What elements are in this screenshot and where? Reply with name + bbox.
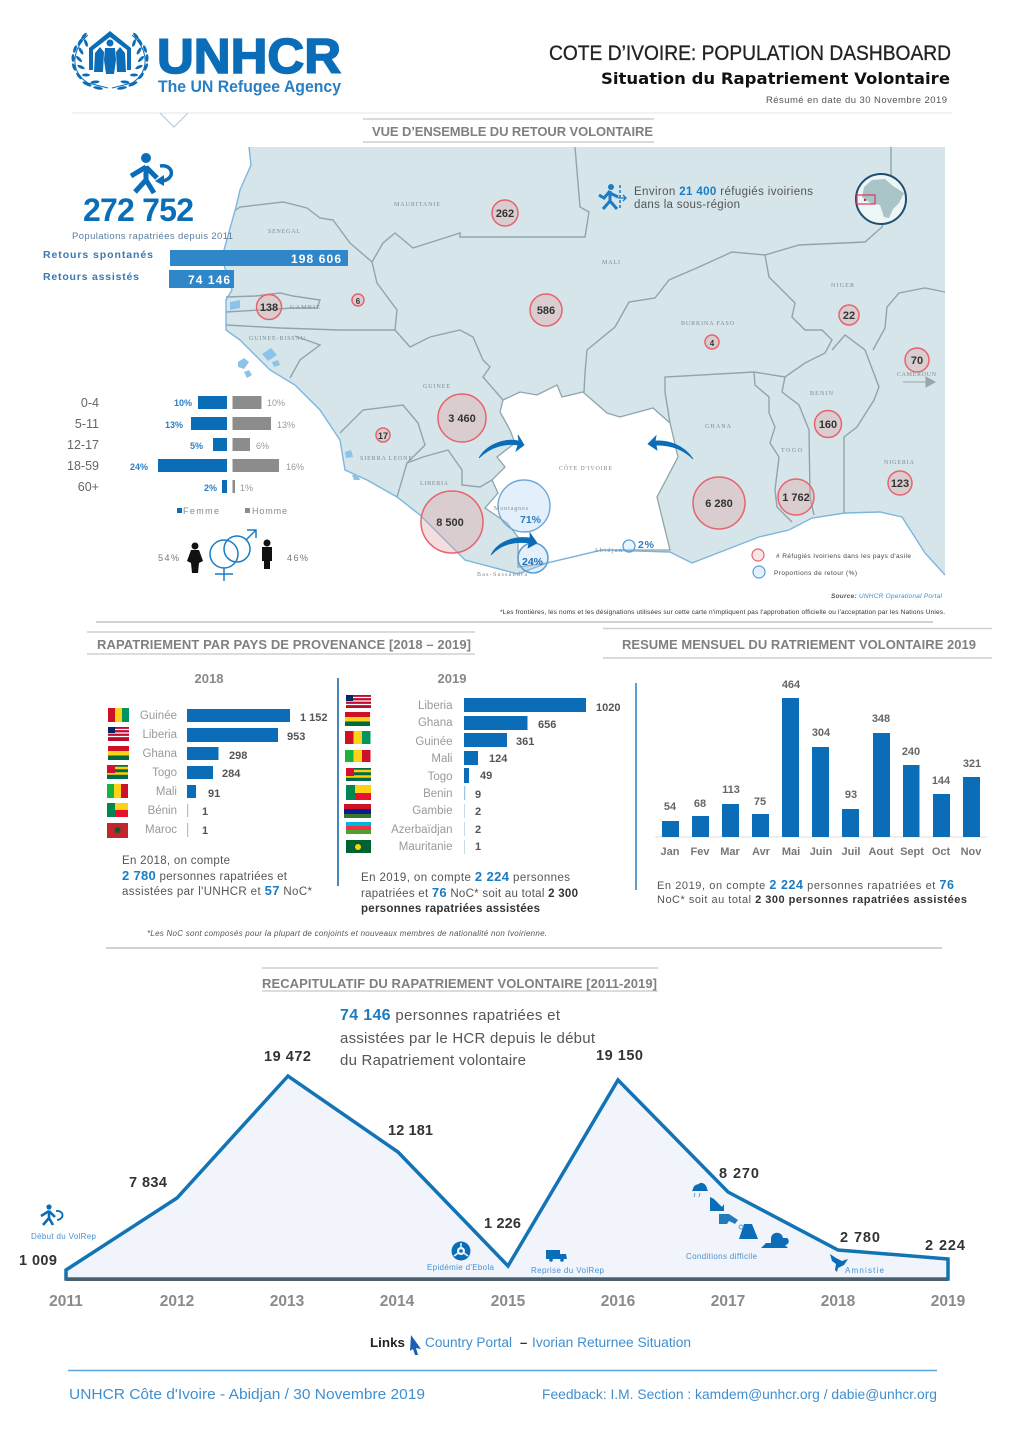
chart values: 7 834 <box>129 1175 167 1191</box>
chart: 2019 origin: 2 <box>475 824 481 836</box>
chart: age pyramid: 1% <box>240 483 253 493</box>
country labels: Abidjan <box>594 548 622 554</box>
chart values: 8 270 <box>719 1166 759 1182</box>
refugee counts: 4 <box>710 339 715 348</box>
chart: 2018 origin: 953 <box>287 731 305 743</box>
chart values <box>19 1048 965 1269</box>
annotation: Ebola epidemic: Epidémie d'Ebola <box>427 1263 495 1272</box>
chart: monthly 2019: 75 <box>754 796 766 808</box>
chart: monthly 2019: 54 <box>664 801 677 813</box>
bar: assisted <box>169 270 234 288</box>
text: 2019 summary <box>361 869 578 915</box>
chart: 2019 origin: Gambie <box>412 805 452 817</box>
refugee counts: 6 280 <box>705 498 733 510</box>
chart: 2018 origin: 2018 <box>195 671 223 686</box>
chart: monthly 2019 <box>655 679 987 906</box>
chart: repatriation 2011-2019 <box>19 1048 966 1310</box>
icon: UNHCR emblem <box>71 31 149 90</box>
label: spontaneous: Retours spontanés <box>43 249 153 261</box>
chart: monthly 2019: 464 <box>782 679 801 691</box>
chart: monthly 2019: Juil <box>842 846 860 858</box>
country labels <box>249 202 937 578</box>
country labels: GAMBIE <box>290 305 320 311</box>
chart: 2019 origin: 124 <box>489 753 508 765</box>
chart years: 2011 <box>49 1293 83 1310</box>
callout: refugees in the sub-region: Environ 21 400 réfugiés ivoiriens <box>634 186 813 198</box>
chart values: 2 224 <box>925 1238 965 1254</box>
islands <box>230 300 360 480</box>
chart: 2019 origin: Guinée <box>415 736 452 748</box>
text: 2018 summary: 2 780 personnes rapatriées et <box>122 868 288 883</box>
heading: overview: VUE D’ENSEMBLE DU RETOUR VOLONTAIRE <box>372 124 653 139</box>
links row: – <box>520 1335 527 1350</box>
coastline <box>223 147 945 575</box>
country labels: NIGER <box>831 283 854 289</box>
chart: 2018 origin: 1 152 <box>300 712 328 724</box>
logo wordmark: UNHCR <box>157 30 341 84</box>
chart: age pyramid: 18-59 <box>67 459 99 473</box>
refugee counts: 17 <box>378 431 388 441</box>
text: 2019 summary: rapatriées et 76 NoC* soit au total 2 300 <box>361 885 578 900</box>
chart years: 2015 <box>491 1293 526 1310</box>
callout: refugees in the sub-region: dans la sous-région <box>634 199 740 211</box>
return proportion circles <box>494 480 655 573</box>
country labels: TOGO <box>781 448 803 454</box>
chart: 2019 origin: 2019 <box>438 671 466 686</box>
chart: monthly 2019: Avr <box>752 846 771 858</box>
label: assisted: Retours assistés <box>43 271 139 283</box>
text: recap callout: assistées par le HCR depuis le début <box>340 1030 596 1047</box>
refugee counts: 22 <box>843 310 855 322</box>
country labels: CÔTE D'IVOIRE <box>559 464 612 472</box>
subtitle: Situation du Rapatriement Volontaire <box>601 69 950 88</box>
chart: monthly 2019: Juin <box>810 846 833 858</box>
chart: 2019 origin <box>344 671 620 915</box>
legend: sex: Femme <box>183 506 219 516</box>
chart years: 2012 <box>160 1293 194 1310</box>
chart values: 1 009 <box>19 1253 57 1269</box>
chart: 2018 origin: Bénin <box>148 805 177 817</box>
country labels: NIGERIA <box>884 460 915 466</box>
chart years: 2018 <box>821 1293 856 1310</box>
chart: monthly 2019: 93 <box>845 789 857 801</box>
text: recap callout: 74 146 personnes rapatriées et <box>340 1007 561 1024</box>
arrow to Cameroon <box>903 377 935 387</box>
chart: monthly 2019: Mar <box>720 846 740 858</box>
annotation: start of voluntary repatriation: Début du VolRep <box>31 1232 97 1241</box>
heading: repatriation by origin: RAPATRIEMENT PAR PAYS DE PROVENANCE [2018 – 2019] <box>97 637 471 652</box>
chart: monthly 2019: 240 <box>902 746 920 758</box>
legend: sex: Homme <box>252 506 287 516</box>
chart: 2019 origin: Azerbaïdjan <box>391 824 452 836</box>
chart: 2018 origin: Mali <box>156 786 177 798</box>
text: monthly summary: En 2019, on compte 2 224 personnes rapatriées et 76 <box>657 878 954 892</box>
chart: 2018 origin: 91 <box>208 788 220 800</box>
chart: 2019 origin: 2 <box>475 806 481 818</box>
chart: monthly 2019: Oct <box>932 846 951 858</box>
bar: assisted: 74 146 <box>188 273 230 287</box>
footer: feedback contacts: Feedback: I.M. Section : kamdem@unhcr.org / dabie@unhcr.org <box>542 1386 937 1402</box>
text: recap callout: du Rapatriement volontaire <box>340 1052 526 1069</box>
Cote d'Ivoire <box>485 385 678 567</box>
map disclaimer: *Les frontières, les noms et les désignations utilisées sur cette carte n'impliquent pas l'approbation officielle ou l'acceptation par les Nations Unies. <box>500 609 945 616</box>
annotation: resumption <box>531 1250 605 1275</box>
country labels: MALI <box>602 260 620 266</box>
refugee counts: 70 <box>911 355 923 367</box>
chart: 2018 origin: Liberia <box>142 729 178 741</box>
return proportion circles: 24% <box>522 556 544 568</box>
chart: age pyramid: 12-17 <box>67 438 99 452</box>
chart: age pyramid: 10% <box>267 398 285 408</box>
refugee counts: 262 <box>496 208 514 220</box>
country labels: SENEGAL <box>268 229 300 235</box>
UNHCR logo <box>71 30 342 96</box>
chart: 2018 origin: Ghana <box>142 748 178 760</box>
chart: 2018 origin: Maroc <box>145 824 177 836</box>
legend: # Réfugiés Ivoiriens dans les pays d'asile <box>776 553 911 560</box>
chart: age pyramid: 13% <box>165 420 183 430</box>
legend: sex <box>177 506 287 516</box>
chart: 2018 origin: 284 <box>222 768 241 780</box>
text: 2019 summary: En 2019, on compte 2 224 personnes <box>361 869 570 884</box>
refugee counts: 3 460 <box>448 413 476 425</box>
refugee counts: 6 <box>356 297 361 306</box>
chart: 2019 origin: Benin <box>423 788 452 800</box>
chart years: 2017 <box>711 1293 745 1310</box>
footer: office and date: UNHCR Côte d'Ivoire - Abidjan / 30 Novembre 2019 <box>69 1386 425 1403</box>
text: recap callout <box>340 1007 596 1069</box>
chart: age pyramid: 6% <box>256 441 269 451</box>
chart: 2019 origin: 49 <box>480 770 492 782</box>
chart: 2019 origin: 9 <box>475 789 481 801</box>
country labels: Bas-Sassandra <box>477 572 527 578</box>
return proportion circles: Montagnes <box>494 506 529 512</box>
land <box>223 147 945 575</box>
links row: Ivorian Returnee Situation <box>532 1335 691 1350</box>
chart values: 1 226 <box>484 1216 521 1232</box>
chart: 2019 origin: 656 <box>538 719 556 731</box>
chart: monthly 2019: 304 <box>812 727 831 739</box>
chart: 2018 origin: 298 <box>229 750 247 762</box>
text: 2018 summary: En 2018, on compte <box>122 855 230 867</box>
bar: spontaneous: 198 606 <box>291 252 341 266</box>
icon: returnee <box>131 153 171 193</box>
icon: refugee crossing <box>599 184 626 210</box>
chart values: 19 150 <box>596 1048 643 1064</box>
chart years: 2016 <box>601 1293 636 1310</box>
country labels: CAMEROUN <box>897 372 937 378</box>
heading: recap: RECAPITULATIF DU RAPATRIEMENT VOLONTAIRE [2011-2019] <box>262 976 657 991</box>
chart: monthly 2019: Jan <box>661 846 680 858</box>
country labels: LIBERIA <box>420 481 449 487</box>
text: 2019 summary: personnes rapatriées assistées <box>361 903 540 915</box>
chart: monthly 2019: 321 <box>963 758 981 770</box>
footnote: *Les NoC sont composés pour la plupart de conjoints et nouveaux membres de nationalité non Ivoirienne. <box>147 929 547 938</box>
return proportion circles: 2% <box>638 539 655 551</box>
text: 2018 summary <box>122 855 313 898</box>
text: monthly summary: NoC* soit au total 2 300 personnes rapatriées assistées <box>657 894 967 906</box>
chart: age pyramid: 5-11 <box>75 417 99 431</box>
flags 2019 <box>344 695 371 853</box>
chart: age pyramid: 24% <box>130 462 148 472</box>
refugee counts: 123 <box>891 478 909 490</box>
icon: gender symbols <box>210 530 256 581</box>
chart: 2018 origin: 1 <box>202 806 208 818</box>
country labels: SIERRA LEONE <box>360 456 412 462</box>
refugee counts: 1 762 <box>782 492 810 504</box>
chart: 2018 origin: Togo <box>152 767 177 779</box>
date line: Résumé en date du 30 Novembre 2019 <box>766 95 947 106</box>
links row: Country Portal <box>425 1335 512 1350</box>
chart values: 19 472 <box>264 1049 311 1065</box>
country labels: GUINEE <box>423 384 450 390</box>
chart: age pyramid <box>67 396 304 516</box>
chart: 2019 origin: Mauritanie <box>399 841 452 853</box>
chart: monthly 2019: 144 <box>932 775 951 787</box>
callout: refugees in the sub-region <box>634 186 813 211</box>
icon: man <box>262 540 272 569</box>
chart years: 2014 <box>380 1293 415 1310</box>
legend <box>752 549 911 578</box>
chart: age pyramid: 10% <box>174 398 192 408</box>
country labels: GUINEE-BISSAU <box>249 336 306 342</box>
annotation: difficult conditions <box>686 1183 789 1261</box>
chart: age pyramid: 13% <box>277 420 295 430</box>
panel: headline figures <box>43 153 348 288</box>
icon: cursor <box>410 1335 421 1355</box>
heading: monthly summary: RESUME MENSUEL DU RATRIEMENT VOLONTAIRE 2019 <box>622 637 976 652</box>
total returnees: 272 752 <box>83 192 194 228</box>
chart: age pyramid: 5% <box>190 441 203 451</box>
chart: monthly 2019: Aout <box>868 846 894 858</box>
panel: sex split: 54% <box>158 553 179 563</box>
chart: monthly 2019: Sept <box>900 846 924 858</box>
country labels: GHANA <box>705 424 732 430</box>
flags 2018 <box>107 708 129 838</box>
chart values: 2 780 <box>840 1230 880 1246</box>
country labels: MAURITANIE <box>394 202 440 208</box>
chart: age pyramid: 16% <box>286 462 304 472</box>
refugee counts <box>260 208 923 529</box>
chart: 2019 origin: 1 <box>475 841 481 853</box>
icon: woman <box>187 542 203 573</box>
annotation: Ebola epidemic <box>427 1242 495 1272</box>
links row: Links <box>370 1335 405 1350</box>
text: monthly summary <box>657 878 967 906</box>
chart: 2019 origin: Togo <box>428 771 452 783</box>
text: 2018 summary: assistées par l'UNHCR et 57 NoC* <box>122 883 313 898</box>
country labels: BURKINA FASO <box>681 321 735 327</box>
source: Source: UNHCR Operational Portal <box>831 593 943 600</box>
total caption: Populations rapatriées depuis 2011 <box>72 231 233 242</box>
title: COTE D’IVOIRE: POPULATION DASHBOARD <box>549 42 951 65</box>
chart years <box>49 1293 966 1310</box>
arrows into Cote d'Ivoire <box>479 435 693 555</box>
chart: 2018 origin: Guinée <box>140 710 177 722</box>
chart: 2019 origin: 361 <box>516 736 534 748</box>
chart values: 12 181 <box>388 1123 433 1139</box>
refugee circles <box>256 200 929 553</box>
chart: monthly 2019: 68 <box>694 798 706 810</box>
logo tagline: The UN Refugee Agency <box>158 78 342 96</box>
chart: 2019 origin: Ghana <box>418 717 453 729</box>
country labels: BENIN <box>810 391 834 397</box>
chart: 2019 origin: 1020 <box>596 702 620 714</box>
chart: age pyramid: 0-4 <box>81 396 99 410</box>
annotation: amnesty <box>830 1254 885 1275</box>
chart: monthly 2019: 113 <box>722 784 740 796</box>
return proportion circles: 71% <box>520 514 542 526</box>
inset: globe locator <box>856 174 906 224</box>
bar: spontaneous <box>170 250 348 266</box>
chart: 2019 origin: Mali <box>431 753 452 765</box>
links row <box>370 1335 691 1355</box>
panel: sex split: 46% <box>287 553 308 563</box>
chart years: 2019 <box>931 1293 966 1310</box>
annotation: difficult conditions: Conditions difficile <box>686 1252 758 1261</box>
chart: monthly 2019: Nov <box>961 846 982 858</box>
chart: age pyramid: 60+ <box>78 480 99 494</box>
chart: 2018 origin <box>107 671 328 898</box>
annotation: amnesty: Amnistie <box>845 1266 885 1275</box>
chart years: 2013 <box>270 1293 305 1310</box>
legend: Proportions de retour (%) <box>774 570 857 577</box>
refugee counts: 8 500 <box>436 517 464 529</box>
chart: age pyramid: 2% <box>204 483 217 493</box>
chart: monthly 2019: Fev <box>691 846 710 858</box>
annotation: start of voluntary repatriation <box>31 1204 97 1241</box>
chart: monthly 2019: Mai <box>782 846 800 858</box>
annotation: resumption: Reprise du VolRep <box>531 1266 605 1275</box>
chart: 2018 origin: 1 <box>202 825 208 837</box>
refugee counts: 138 <box>260 302 278 314</box>
refugee counts: 160 <box>819 419 837 431</box>
panel: map of returns <box>223 147 945 578</box>
panel: sex split <box>158 530 308 581</box>
chart: monthly 2019: 348 <box>872 713 890 725</box>
refugee counts: 586 <box>537 305 555 317</box>
chart: 2019 origin: Liberia <box>418 700 453 712</box>
